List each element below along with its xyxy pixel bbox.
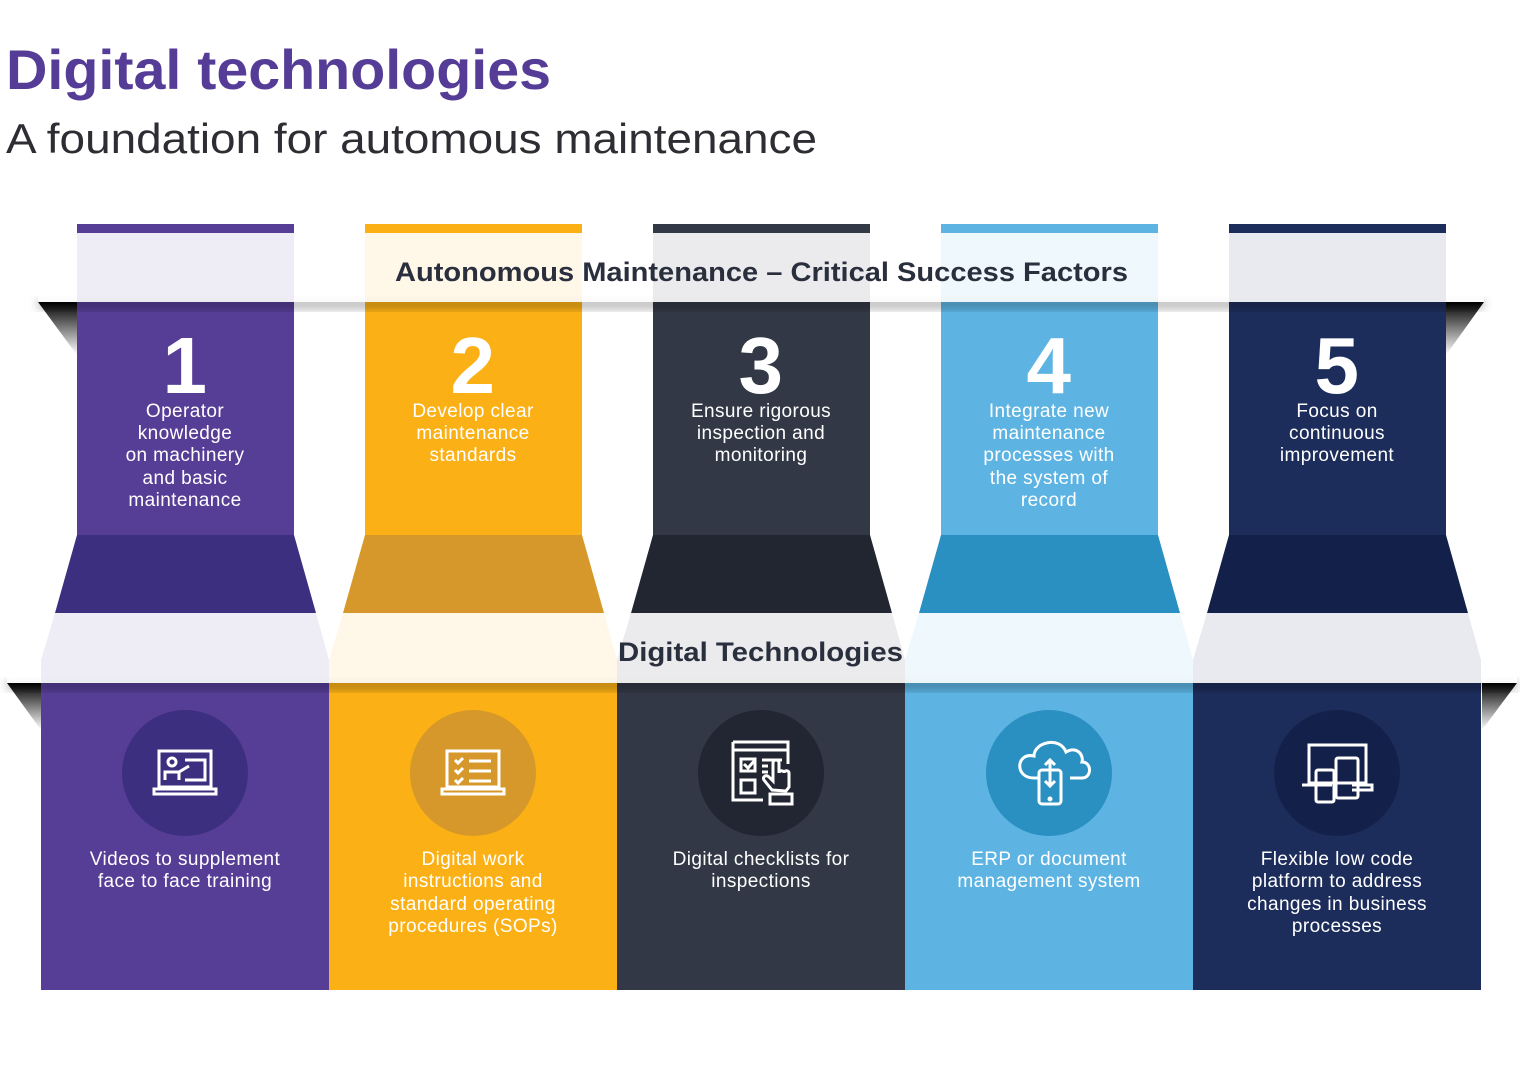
numbers and factor texts: 1 (163, 321, 207, 410)
technology texts (90, 849, 1427, 937)
bottom banner: Digital Technologies (618, 637, 903, 667)
column 5 (1193, 224, 1481, 990)
technology texts: processes (1292, 916, 1382, 937)
column 4 (905, 224, 1193, 990)
technology texts: changes in business (1247, 894, 1427, 915)
icon: laptop video (154, 751, 216, 794)
numbers and factor texts: processes with (983, 445, 1115, 466)
numbers and factor texts: Develop clear (412, 401, 534, 422)
numbers and factor texts: knowledge (138, 423, 232, 444)
technology texts: management system (957, 871, 1141, 892)
technology texts: face to face training (98, 871, 272, 892)
numbers and factor texts: Focus on (1296, 401, 1378, 422)
icon: laptop checklist (442, 751, 504, 794)
numbers and factor texts: record (1021, 490, 1077, 511)
column 3 (617, 224, 905, 990)
technology texts: inspections (711, 871, 811, 892)
numbers and factor texts: improvement (1280, 445, 1394, 466)
numbers and factor texts: Integrate new (989, 401, 1109, 422)
title: Digital technologies (6, 38, 551, 101)
technology texts: Digital work (422, 849, 525, 870)
icon: checklist with hand (733, 742, 792, 804)
column 2 (329, 224, 617, 990)
subtitle: A foundation for automous maintenance (6, 115, 817, 162)
icon: devices (1302, 745, 1372, 802)
numbers and factor texts: maintenance (992, 423, 1106, 444)
numbers and factor texts: Ensure rigorous (691, 401, 831, 422)
technology texts: Videos to supplement (90, 849, 281, 870)
technology texts: Flexible low code (1261, 849, 1413, 870)
numbers and factor texts: 3 (739, 321, 783, 410)
numbers and factor texts: 5 (1315, 321, 1359, 410)
numbers and factor texts: monitoring (715, 445, 807, 466)
top banner (38, 233, 1484, 308)
bottom banner (7, 613, 1517, 689)
technology texts: instructions and (403, 871, 543, 892)
technology texts: ERP or document (971, 849, 1127, 870)
shadow triangles (7, 302, 1517, 730)
numbers and factor texts: Operator (146, 401, 224, 422)
numbers and factor texts (126, 321, 1394, 511)
numbers and factor texts: continuous (1289, 423, 1385, 444)
numbers and factor texts: inspection and (697, 423, 825, 444)
top banner: Autonomous Maintenance – Critical Success Factors (395, 257, 1128, 287)
icon: cloud phone (1020, 742, 1090, 804)
numbers and factor texts: standards (429, 445, 517, 466)
technology texts: procedures (SOPs) (388, 916, 558, 937)
numbers and factor texts: maintenance (128, 490, 242, 511)
technology texts: Digital checklists for (673, 849, 850, 870)
numbers and factor texts: 4 (1027, 321, 1072, 410)
technology texts: standard operating (390, 894, 556, 915)
numbers and factor texts: on machinery (126, 445, 245, 466)
numbers and factor texts: 2 (451, 321, 495, 410)
numbers and factor texts: maintenance (416, 423, 530, 444)
column 1 (41, 224, 329, 990)
technology texts: platform to address (1252, 871, 1422, 892)
numbers and factor texts: and basic (143, 468, 227, 489)
numbers and factor texts: the system of (990, 468, 1108, 489)
